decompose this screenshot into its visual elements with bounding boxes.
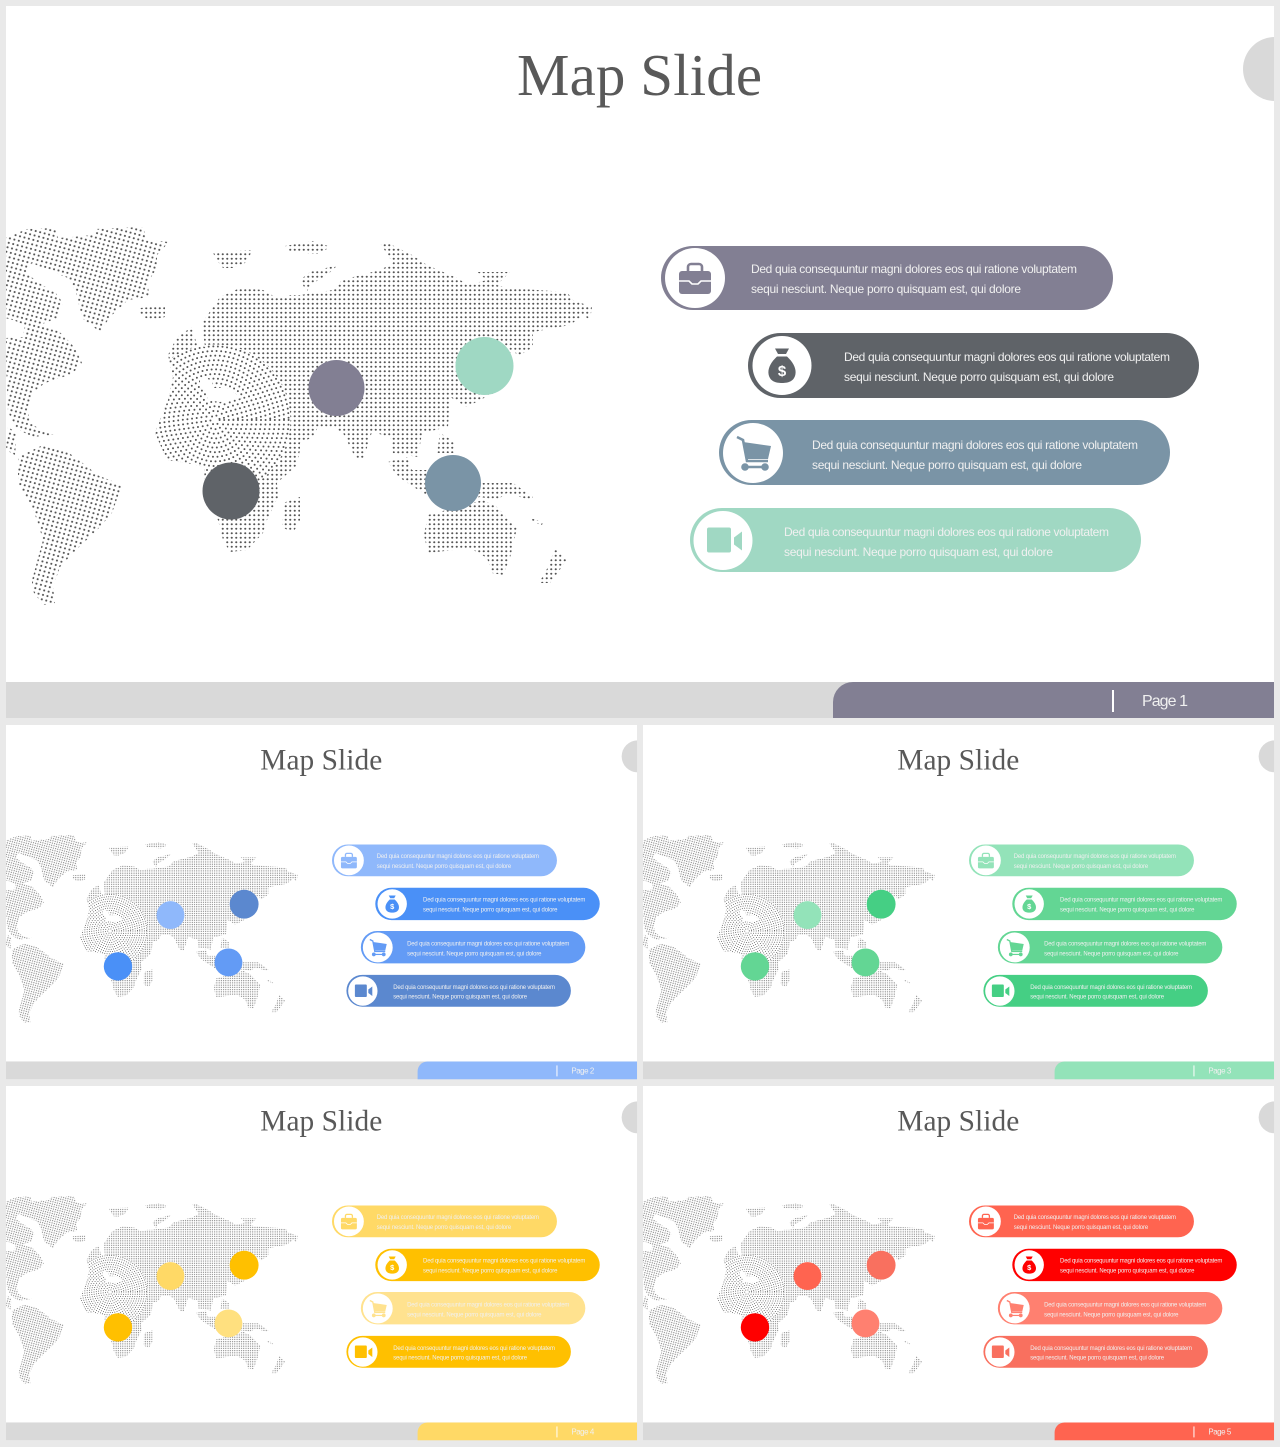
pill 1: briefcase: sequi nesciunt. Neque porro quisquam est, qui dolore bbox=[1014, 1225, 1149, 1231]
pill 1: briefcase bbox=[969, 844, 1194, 876]
pill 3: shopping cart: sequi nesciunt. Neque porro quisquam est, qui dolore bbox=[1044, 1312, 1179, 1318]
title: Map Slide bbox=[260, 744, 382, 776]
pill 4: video camera bbox=[346, 975, 571, 1007]
decorative corner circle bbox=[622, 740, 637, 772]
pill 1: briefcase bbox=[969, 1205, 1194, 1237]
pill 1: briefcase: Ded quia consequuntur magni dolores eos qui ratione voluptatem bbox=[1014, 854, 1176, 860]
pill 2: money bag: Ded quia consequuntur magni dolores eos qui ratione voluptatem bbox=[423, 1259, 585, 1265]
title: Map Slide bbox=[517, 42, 762, 108]
title: Map Slide bbox=[260, 1105, 382, 1137]
pill 2: money bag bbox=[1012, 888, 1237, 920]
pill 1: briefcase: Ded quia consequuntur magni dolores eos qui ratione voluptatem bbox=[751, 262, 1077, 276]
footer band bbox=[6, 682, 852, 718]
dotted world map bbox=[5, 227, 592, 605]
pill 2: money bag bbox=[375, 1249, 600, 1281]
map marker: east Asia bbox=[230, 1251, 259, 1280]
pill 4: video camera: Ded quia consequuntur magni dolores eos qui ratione voluptatem bbox=[1030, 985, 1192, 991]
pill 2: money bag: $ bbox=[390, 902, 395, 911]
pill 2: money bag: $ bbox=[390, 1263, 395, 1272]
title: Map Slide bbox=[897, 744, 1019, 776]
map marker: east Asia bbox=[230, 890, 259, 919]
map marker: southeast Asia bbox=[215, 948, 242, 976]
pill 3: shopping cart bbox=[361, 1292, 585, 1324]
slide background bbox=[6, 1086, 637, 1440]
pill 3: shopping cart: Ded quia consequuntur magni dolores eos qui ratione voluptatem bbox=[812, 438, 1138, 452]
map marker: Africa bbox=[741, 952, 769, 981]
footer tab with page number bbox=[833, 682, 1274, 718]
footer tab with page number: Page 4 bbox=[571, 1427, 595, 1436]
decorative corner circle bbox=[1259, 1101, 1280, 1133]
pill 3: shopping cart: Ded quia consequuntur magni dolores eos qui ratione voluptatem bbox=[1044, 941, 1206, 947]
decorative corner circle bbox=[1243, 37, 1274, 101]
dotted world map bbox=[5, 835, 298, 1023]
pill 2: money bag: Ded quia consequuntur magni dolores eos qui ratione voluptatem bbox=[423, 898, 585, 904]
pill 2: money bag: $ bbox=[778, 363, 787, 380]
pill 2: money bag bbox=[1012, 1249, 1237, 1281]
pill 4: video camera: sequi nesciunt. Neque porro quisquam est, qui dolore bbox=[1030, 1356, 1165, 1362]
map marker: central Asia bbox=[157, 901, 184, 929]
pill 4: video camera: sequi nesciunt. Neque porro quisquam est, qui dolore bbox=[393, 1356, 528, 1362]
panel: red slide, page 5 bbox=[642, 1086, 1280, 1440]
map marker: central Asia bbox=[794, 1262, 821, 1290]
pill 3: shopping cart bbox=[998, 1292, 1222, 1324]
slide background bbox=[6, 725, 637, 1079]
map marker: southeast Asia bbox=[852, 1309, 879, 1337]
pill 2: money bag: Ded quia consequuntur magni dolores eos qui ratione voluptatem bbox=[1060, 1259, 1222, 1265]
pill 2: money bag: sequi nesciunt. Neque porro quisquam est, qui dolore bbox=[423, 1269, 558, 1275]
pill 3: shopping cart bbox=[361, 931, 585, 963]
pill 1: briefcase: Ded quia consequuntur magni dolores eos qui ratione voluptatem bbox=[377, 854, 539, 860]
pill 1: briefcase: Ded quia consequuntur magni dolores eos qui ratione voluptatem bbox=[377, 1215, 539, 1221]
pill 3: shopping cart: sequi nesciunt. Neque porro quisquam est, qui dolore bbox=[1044, 951, 1179, 957]
footer tab with page number: Page 2 bbox=[571, 1066, 595, 1075]
pill 2: money bag: Ded quia consequuntur magni dolores eos qui ratione voluptatem bbox=[844, 350, 1170, 364]
pill 1: briefcase: sequi nesciunt. Neque porro quisquam est, qui dolore bbox=[751, 282, 1021, 296]
pill 2: money bag: sequi nesciunt. Neque porro quisquam est, qui dolore bbox=[844, 370, 1114, 384]
panel: green slide, page 3 bbox=[642, 725, 1280, 1079]
footer tab with page number bbox=[418, 1061, 637, 1079]
map marker: southeast Asia bbox=[852, 948, 879, 976]
pill 2: money bag: Ded quia consequuntur magni dolores eos qui ratione voluptatem bbox=[1060, 898, 1222, 904]
pill 1: briefcase: Ded quia consequuntur magni dolores eos qui ratione voluptatem bbox=[1014, 1215, 1176, 1221]
pill 4: video camera: Ded quia consequuntur magni dolores eos qui ratione voluptatem bbox=[393, 985, 555, 991]
pill 3: shopping cart bbox=[998, 931, 1222, 963]
slide background bbox=[643, 1086, 1274, 1440]
pill 2: money bag: sequi nesciunt. Neque porro quisquam est, qui dolore bbox=[1060, 908, 1195, 914]
map marker: Africa bbox=[741, 1313, 769, 1342]
pill 4: video camera bbox=[983, 1336, 1208, 1368]
pill 1: briefcase bbox=[332, 844, 557, 876]
footer tab with page number: Page 5 bbox=[1208, 1427, 1232, 1436]
pill 1: briefcase bbox=[661, 246, 1113, 310]
footer tab with page number bbox=[1055, 1422, 1274, 1440]
pill 4: video camera: Ded quia consequuntur magni dolores eos qui ratione voluptatem bbox=[1030, 1346, 1192, 1352]
pill 2: money bag: sequi nesciunt. Neque porro quisquam est, qui dolore bbox=[423, 908, 558, 914]
footer band bbox=[643, 1422, 1274, 1440]
pill 4: video camera: Ded quia consequuntur magni dolores eos qui ratione voluptatem bbox=[784, 525, 1109, 539]
decorative corner circle bbox=[622, 1101, 654, 1133]
panel: blue slide, page 2 bbox=[5, 725, 654, 1079]
footer band bbox=[6, 1062, 426, 1080]
pill 1: briefcase: sequi nesciunt. Neque porro quisquam est, qui dolore bbox=[1014, 864, 1149, 870]
pill 4: video camera bbox=[346, 1336, 571, 1368]
map marker: east Asia bbox=[867, 1251, 896, 1280]
map marker: central Asia bbox=[308, 360, 364, 416]
map marker: southeast Asia bbox=[215, 1309, 242, 1337]
pill 4: video camera: sequi nesciunt. Neque porro quisquam est, qui dolore bbox=[784, 545, 1053, 559]
map marker: central Asia bbox=[157, 1262, 184, 1290]
pill 1: briefcase: sequi nesciunt. Neque porro quisquam est, qui dolore bbox=[377, 1225, 512, 1231]
footer tab with page number: Page 1 bbox=[1142, 693, 1188, 710]
map marker: central Asia bbox=[794, 901, 821, 929]
footer tab with page number bbox=[1055, 1061, 1274, 1079]
map marker: east Asia bbox=[867, 890, 896, 919]
map marker: Africa bbox=[104, 1313, 132, 1342]
pill 3: shopping cart: sequi nesciunt. Neque porro quisquam est, qui dolore bbox=[407, 1312, 542, 1318]
dotted world map bbox=[642, 1196, 935, 1384]
pill 4: video camera: sequi nesciunt. Neque porro quisquam est, qui dolore bbox=[393, 995, 528, 1001]
dotted world map bbox=[5, 1196, 298, 1384]
map marker: east Asia bbox=[456, 337, 514, 395]
map marker: Africa bbox=[104, 952, 132, 981]
slide background bbox=[643, 725, 1274, 1079]
pill 4: video camera: Ded quia consequuntur magni dolores eos qui ratione voluptatem bbox=[393, 1346, 555, 1352]
pill 2: money bag bbox=[748, 333, 1199, 398]
pill 2: money bag: sequi nesciunt. Neque porro quisquam est, qui dolore bbox=[1060, 1269, 1195, 1275]
pill 4: video camera bbox=[983, 975, 1208, 1007]
pill 4: video camera: sequi nesciunt. Neque porro quisquam est, qui dolore bbox=[1030, 995, 1165, 1001]
pill 2: money bag: $ bbox=[1027, 902, 1032, 911]
slide background bbox=[6, 6, 1274, 718]
footer tab with page number: Page 3 bbox=[1208, 1066, 1232, 1075]
pill 1: briefcase: sequi nesciunt. Neque porro quisquam est, qui dolore bbox=[377, 864, 512, 870]
pill 3: shopping cart: sequi nesciunt. Neque porro quisquam est, qui dolore bbox=[407, 951, 542, 957]
pill 3: shopping cart: Ded quia consequuntur magni dolores eos qui ratione voluptatem bbox=[407, 941, 569, 947]
panel: main slide, page 1 bbox=[5, 6, 1280, 718]
map marker: Africa bbox=[202, 462, 260, 520]
pill 3: shopping cart: sequi nesciunt. Neque porro quisquam est, qui dolore bbox=[812, 458, 1082, 472]
footer band bbox=[643, 1061, 1274, 1079]
pill 1: briefcase bbox=[332, 1205, 557, 1237]
pill 4: video camera bbox=[690, 508, 1141, 572]
pill 2: money bag bbox=[375, 888, 600, 920]
footer band bbox=[6, 1422, 637, 1440]
map marker: southeast Asia bbox=[425, 455, 481, 511]
dotted world map bbox=[642, 835, 935, 1023]
title: Map Slide bbox=[897, 1105, 1019, 1137]
pill 3: shopping cart bbox=[719, 420, 1170, 485]
pill 3: shopping cart: Ded quia consequuntur magni dolores eos qui ratione voluptatem bbox=[407, 1302, 569, 1308]
pill 2: money bag: $ bbox=[1027, 1263, 1032, 1272]
panel: yellow slide, page 4 bbox=[5, 1086, 654, 1440]
footer tab with page number bbox=[418, 1422, 637, 1440]
pill 3: shopping cart: Ded quia consequuntur magni dolores eos qui ratione voluptatem bbox=[1044, 1302, 1206, 1308]
decorative corner circle bbox=[1258, 740, 1274, 772]
